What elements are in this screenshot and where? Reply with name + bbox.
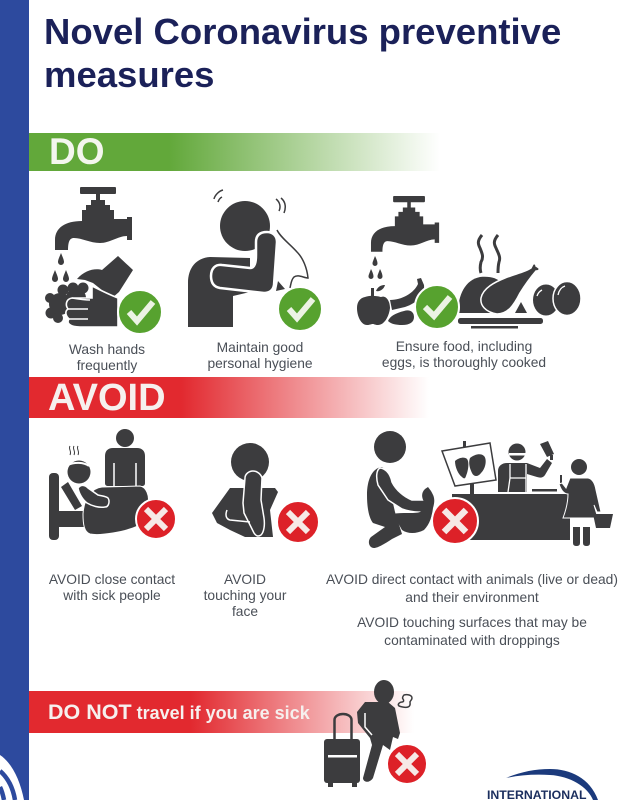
caption: wash hands: frequently bbox=[77, 358, 137, 373]
caption: wash hands: Wash hands bbox=[69, 342, 145, 357]
caption: animals: AVOID direct contact with animals (live or dead) bbox=[326, 572, 618, 587]
DO banner bbox=[29, 133, 440, 171]
title: Novel Coronavirus preventive bbox=[44, 11, 561, 52]
icon: cross touching face bbox=[277, 501, 319, 543]
AVOID banner: AVOID bbox=[48, 377, 166, 419]
caption: food bbox=[382, 339, 546, 370]
icon: market scene with animals bbox=[367, 431, 613, 548]
caption: touching face: AVOID bbox=[224, 572, 266, 587]
DO NOT banner: DO NOT travel if you are sick bbox=[48, 700, 310, 724]
icon: wash hands bbox=[45, 187, 133, 327]
icon: sick person in bed bbox=[49, 429, 149, 540]
caption: food: Ensure food, including bbox=[396, 339, 532, 354]
caption: close contact bbox=[49, 572, 175, 603]
caption: surfaces: contaminated with droppings bbox=[384, 633, 560, 648]
caption: touching face bbox=[204, 572, 286, 619]
caption: surfaces bbox=[357, 615, 587, 648]
caption: animals bbox=[326, 572, 618, 605]
title bbox=[44, 11, 561, 95]
caption: touching face: face bbox=[232, 604, 258, 619]
icon: cross traveller bbox=[387, 744, 427, 784]
caption: close contact: AVOID close contact bbox=[49, 572, 175, 587]
title: measures bbox=[44, 54, 214, 95]
caption: animals: and their environment bbox=[405, 590, 539, 605]
caption: close contact: with sick people bbox=[63, 588, 161, 603]
icon: food and tap bbox=[357, 196, 581, 328]
icon: check food bbox=[415, 285, 459, 329]
icon: person sneezing bbox=[188, 190, 308, 327]
caption: hygiene bbox=[207, 340, 313, 371]
icon: person touching face bbox=[212, 443, 278, 537]
AVOID banner bbox=[29, 377, 429, 418]
logo: international bbox=[487, 769, 598, 800]
icon: sick traveller bbox=[324, 680, 412, 787]
icon: cross sick person bbox=[136, 499, 176, 539]
icon: check hygiene bbox=[278, 287, 322, 331]
icon: check wash hands bbox=[118, 290, 162, 334]
logo: left corner bbox=[0, 755, 24, 800]
left blue stripe bbox=[0, 0, 29, 800]
caption: hygiene: Maintain good bbox=[217, 340, 303, 355]
caption: wash hands bbox=[69, 342, 145, 373]
caption: surfaces: AVOID touching surfaces that may be bbox=[357, 615, 587, 630]
caption: hygiene: personal hygiene bbox=[207, 356, 313, 371]
DO banner: DO bbox=[49, 131, 104, 172]
caption: touching face: touching your bbox=[204, 588, 286, 603]
icon: cross market bbox=[432, 498, 478, 544]
DO NOT banner bbox=[29, 691, 414, 733]
caption: food: eggs, is thoroughly cooked bbox=[382, 355, 546, 370]
